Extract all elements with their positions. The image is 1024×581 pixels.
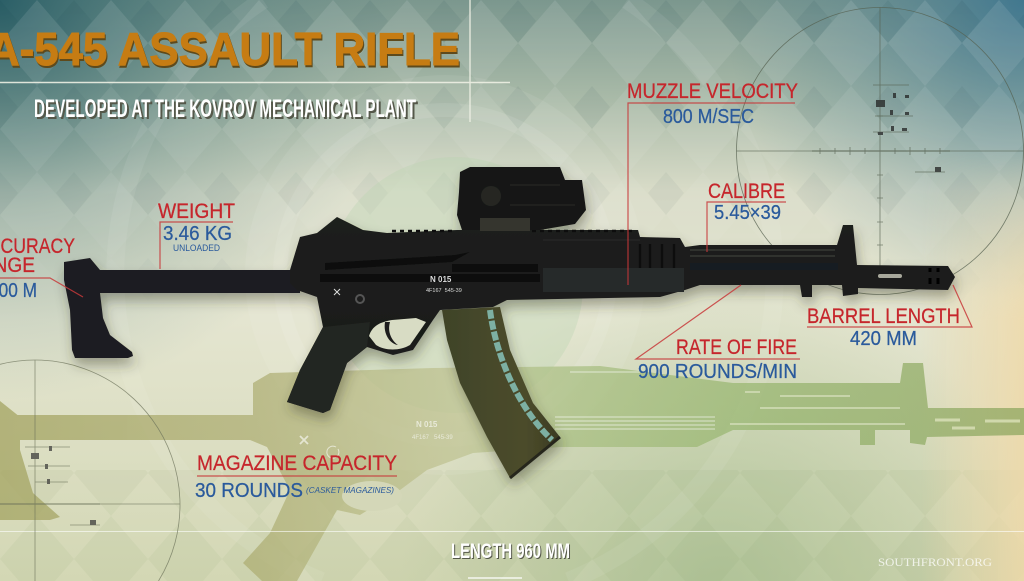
callout: accuracy range [0, 235, 83, 302]
callout: calibre: 5.45×39 [714, 202, 781, 224]
title: A-545 ASSAULT RIFLE [0, 23, 460, 75]
callout: calibre [707, 180, 786, 252]
subtitle: DEVELOPED AT THE KOVROV MECHANICAL PLANT [34, 95, 416, 123]
watermark: SOUTHFRONT.ORG [878, 557, 992, 569]
markings [334, 275, 462, 295]
ghost rifle details [300, 372, 1020, 458]
pistol grip [287, 322, 370, 413]
title: A-545 ASSAULT RIFLE [0, 25, 461, 77]
callout: weight [158, 200, 235, 269]
receiver and barrel [287, 217, 955, 413]
ghost rifle watermark [0, 363, 1024, 581]
callout: barrel length [807, 285, 972, 350]
callout: muzzle velocity: 800 M/SEC [663, 106, 754, 128]
rifle [64, 167, 955, 478]
callout: magazine capacity: MAGAZINE CAPACITY [197, 452, 397, 475]
ghost rifle details: N 015 [416, 420, 438, 429]
callout: magazine capacity: 30 ROUNDS [195, 480, 303, 502]
callout: rate of fire: 900 ROUNDS/MIN [638, 361, 797, 383]
rail teeth [392, 230, 636, 232]
callout: magazine capacity: (CASKET MAGAZINES) [306, 486, 394, 495]
callout: weight: 3.46 KG [163, 223, 232, 245]
overall length label: LENGTH 960 MM [452, 541, 571, 564]
callout: rate of fire: RATE OF FIRE [676, 336, 797, 359]
callout: magazine capacity [195, 452, 397, 502]
callout: muzzle velocity [627, 80, 798, 285]
callout: calibre: CALIBRE [708, 180, 785, 203]
callout: muzzle velocity: MUZZLE VELOCITY [627, 80, 798, 103]
scope reticle: bottom left [0, 360, 180, 581]
scope reticle: top right [736, 7, 1024, 294]
markings: 4F167 545-39 [426, 288, 462, 294]
callout: barrel length: BARREL LENGTH [807, 305, 960, 328]
subtitle: DEVELOPED AT THE KOVROV MECHANICAL PLANT [36, 97, 418, 125]
trigger guard opening [369, 318, 426, 350]
barrel detail [690, 250, 835, 256]
magazine [442, 307, 560, 478]
callout: barrel length: 420 MM [850, 328, 917, 350]
horizontal rule [0, 530, 1024, 532]
ejection port and receiver detail [320, 252, 540, 282]
callout: weight: UNLOADED [173, 243, 220, 253]
gap between barrel tubes [690, 263, 838, 270]
overall length label: LENGTH 960 MM [451, 540, 570, 563]
optic sight [457, 167, 586, 231]
stock [64, 258, 300, 358]
markings: N 015 [430, 275, 452, 284]
overall length label [451, 540, 571, 578]
trigger [385, 322, 398, 345]
ghost trigger guard opening [342, 481, 402, 511]
callout: rate of fire [636, 285, 800, 383]
ghost rifle details: 4F167 545-39 [412, 435, 453, 441]
subtitle [34, 95, 418, 125]
title rules [0, 0, 510, 122]
callout: weight: WEIGHT [158, 200, 235, 223]
